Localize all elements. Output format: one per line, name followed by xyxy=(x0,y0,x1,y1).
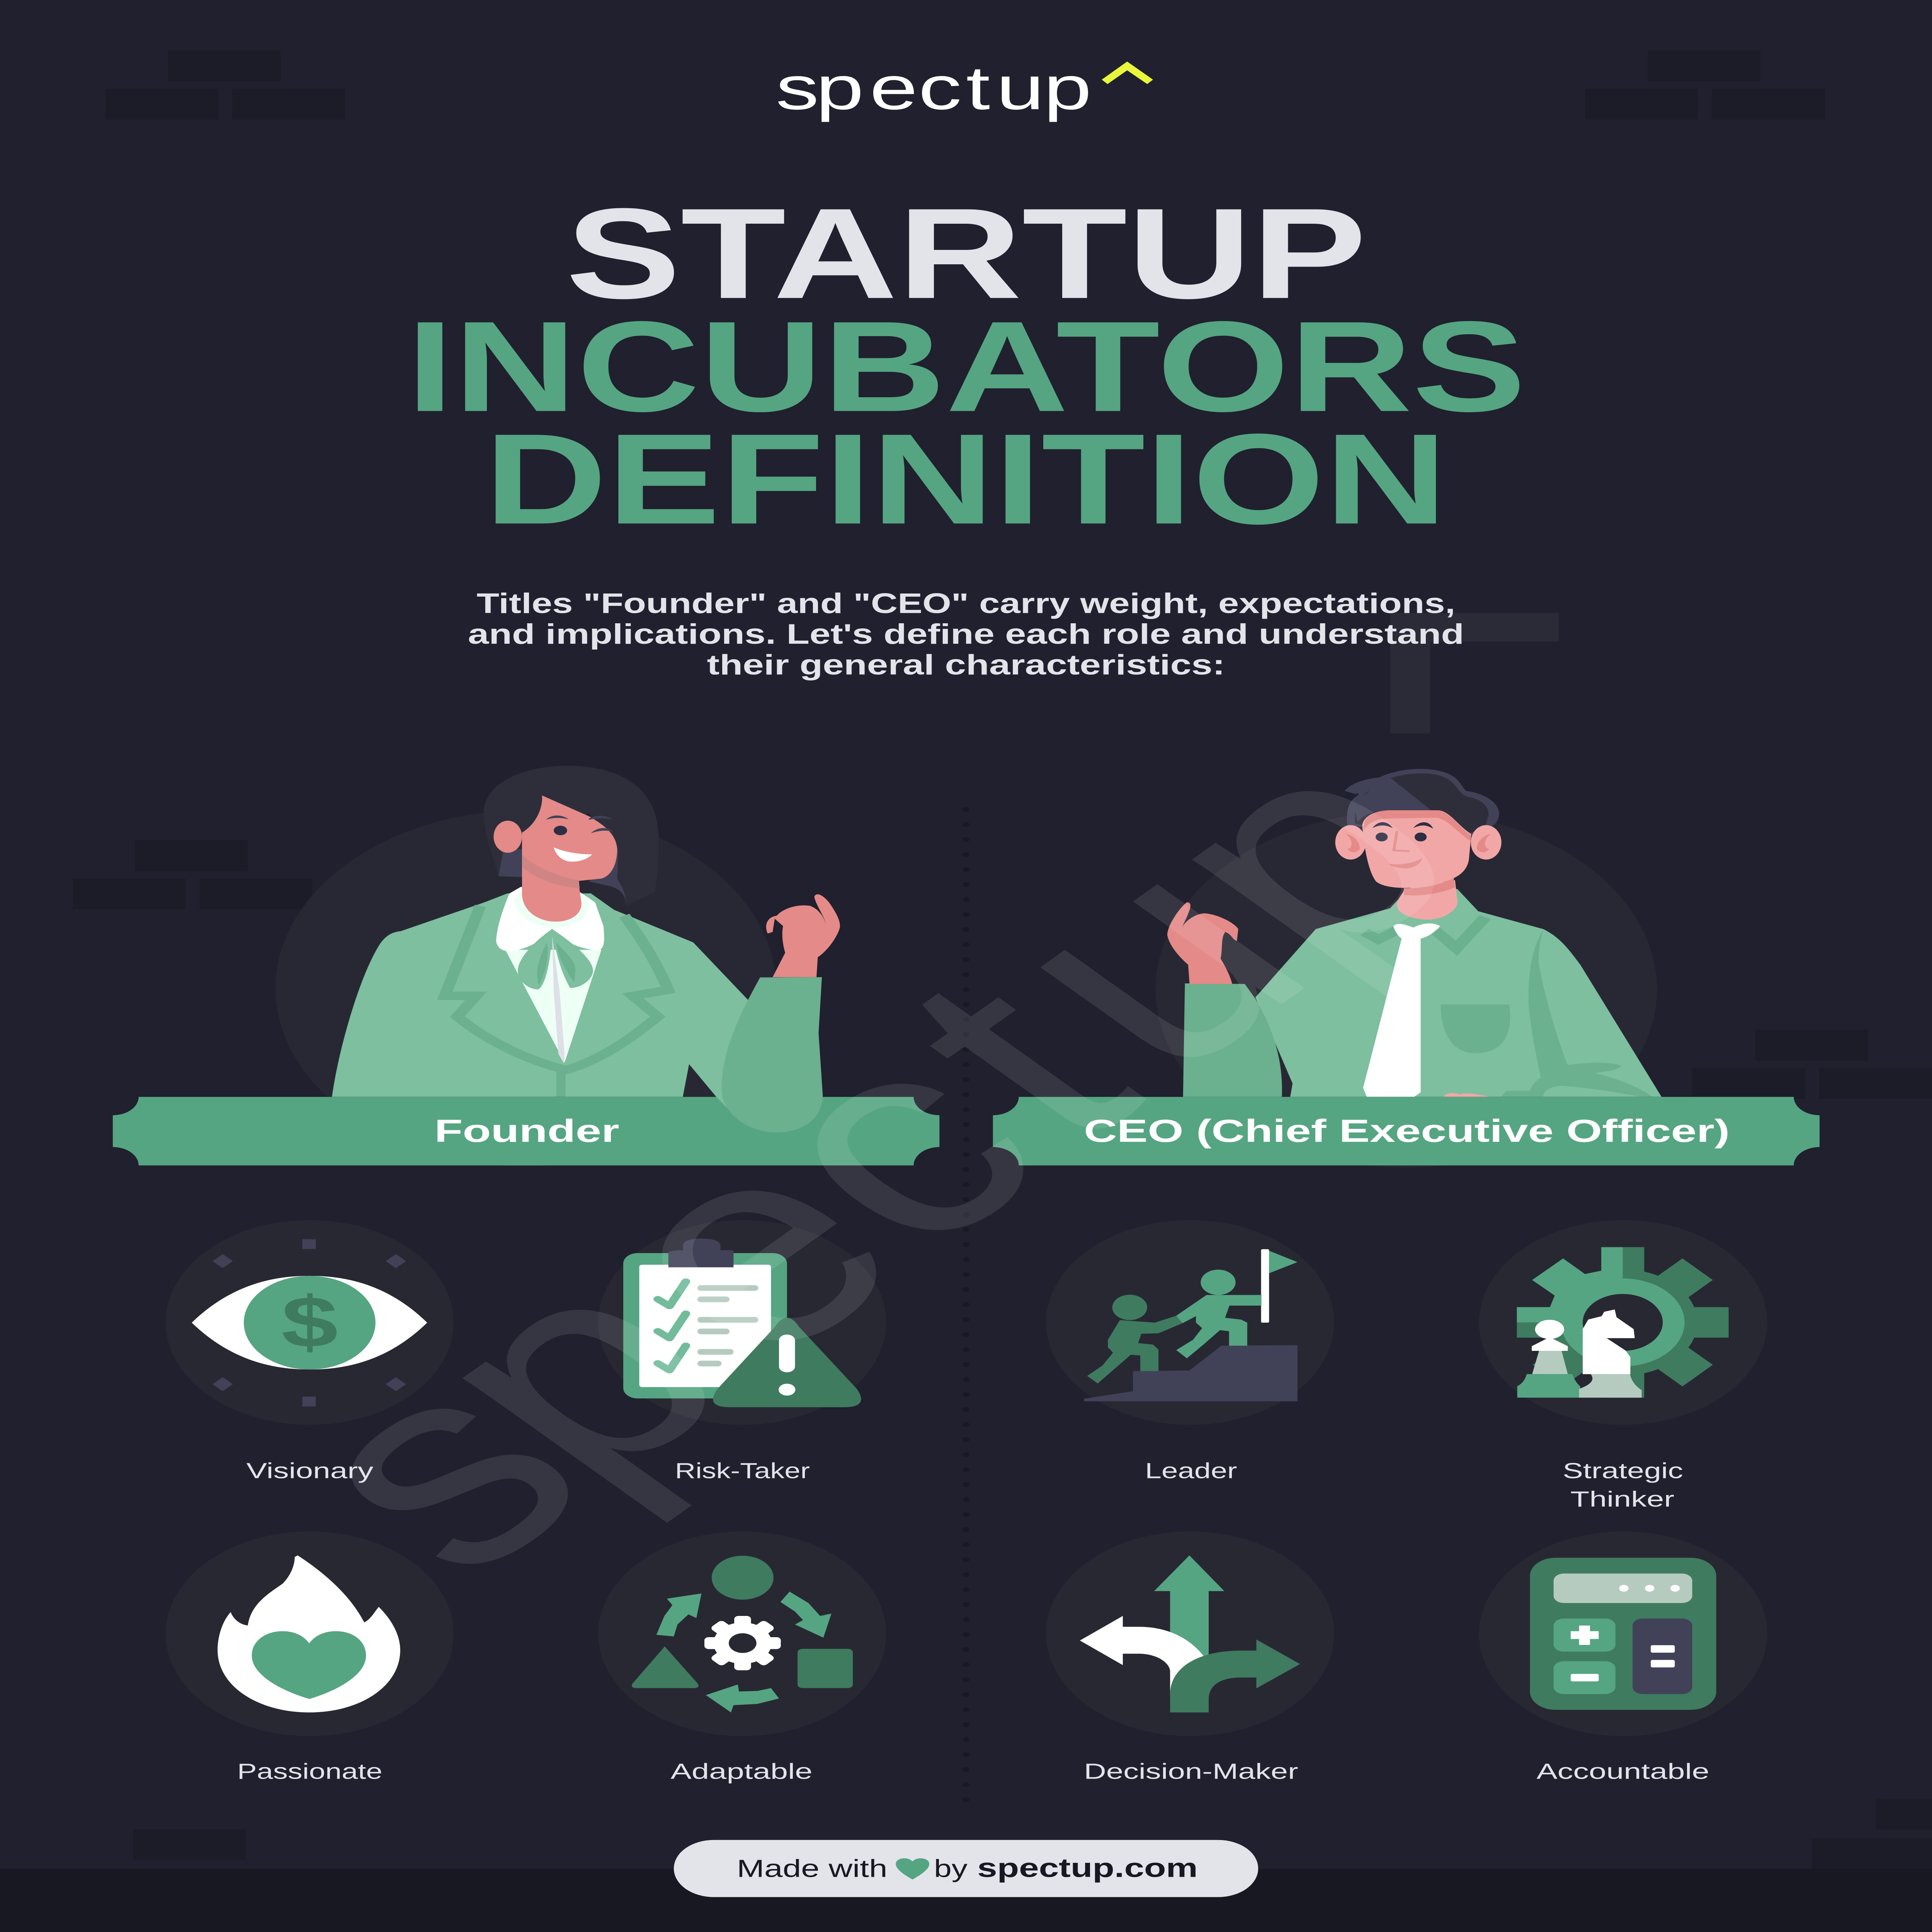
banner: ceo xyxy=(993,1097,1820,1165)
banner: founder xyxy=(113,1097,939,1165)
intro text xyxy=(468,588,1464,681)
footer pill: Made with xyxy=(737,1854,888,1882)
label: strategic thinker: Thinker xyxy=(1570,1487,1674,1511)
intro text: Titles "Founder" and "CEO" carry weight, expectations, xyxy=(477,588,1455,619)
title: INCUBATORS xyxy=(406,295,1526,439)
label: decision-maker: Decision-Maker xyxy=(1084,1759,1298,1784)
icon: adaptable cycle xyxy=(598,1531,886,1736)
label: risk-taker: Risk-Taker xyxy=(675,1459,810,1483)
intro text: their general characteristics: xyxy=(707,649,1225,681)
banner: founder: Founder xyxy=(434,1113,619,1149)
icon: accountable calculator xyxy=(1479,1531,1767,1736)
icon: visionary eye xyxy=(165,1220,454,1425)
logo: spectup xyxy=(776,54,1092,122)
ceo figure xyxy=(1167,769,1662,1097)
founder backdrop circle xyxy=(276,810,776,1166)
label: visionary: Visionary xyxy=(246,1459,374,1483)
founder figure xyxy=(332,766,840,1110)
title xyxy=(406,182,1526,551)
title: DEFINITION xyxy=(484,407,1447,551)
ceo backdrop circle xyxy=(1156,811,1657,1167)
icon: visionary eye: $ xyxy=(281,1282,338,1362)
label: strategic thinker: Strategic xyxy=(1563,1459,1683,1483)
title: STARTUP xyxy=(566,182,1367,325)
label: accountable: Accountable xyxy=(1536,1759,1709,1784)
label: adaptable: Adaptable xyxy=(670,1759,813,1784)
icon: strategic gear and chess xyxy=(1479,1220,1767,1425)
footer pill xyxy=(674,1840,1258,1897)
footer pill: spectup.com xyxy=(977,1853,1198,1883)
founder sleeve xyxy=(689,977,823,1133)
intro text: and implications. Let's define each role and understand xyxy=(468,618,1464,650)
watermark: spectup xyxy=(212,689,1536,1629)
icon: leader climbing steps xyxy=(1046,1220,1334,1425)
label: strategic thinker xyxy=(1563,1459,1683,1511)
icon: passionate flame heart xyxy=(165,1531,454,1736)
icon: decision arrows xyxy=(1046,1531,1334,1736)
label: passionate: Passionate xyxy=(237,1759,383,1784)
icon: risk-taker clipboard xyxy=(598,1220,886,1425)
banner: ceo: CEO (Chief Executive Officer) xyxy=(1084,1113,1730,1149)
label: leader: Leader xyxy=(1145,1459,1237,1483)
footer pill: by xyxy=(934,1854,968,1882)
